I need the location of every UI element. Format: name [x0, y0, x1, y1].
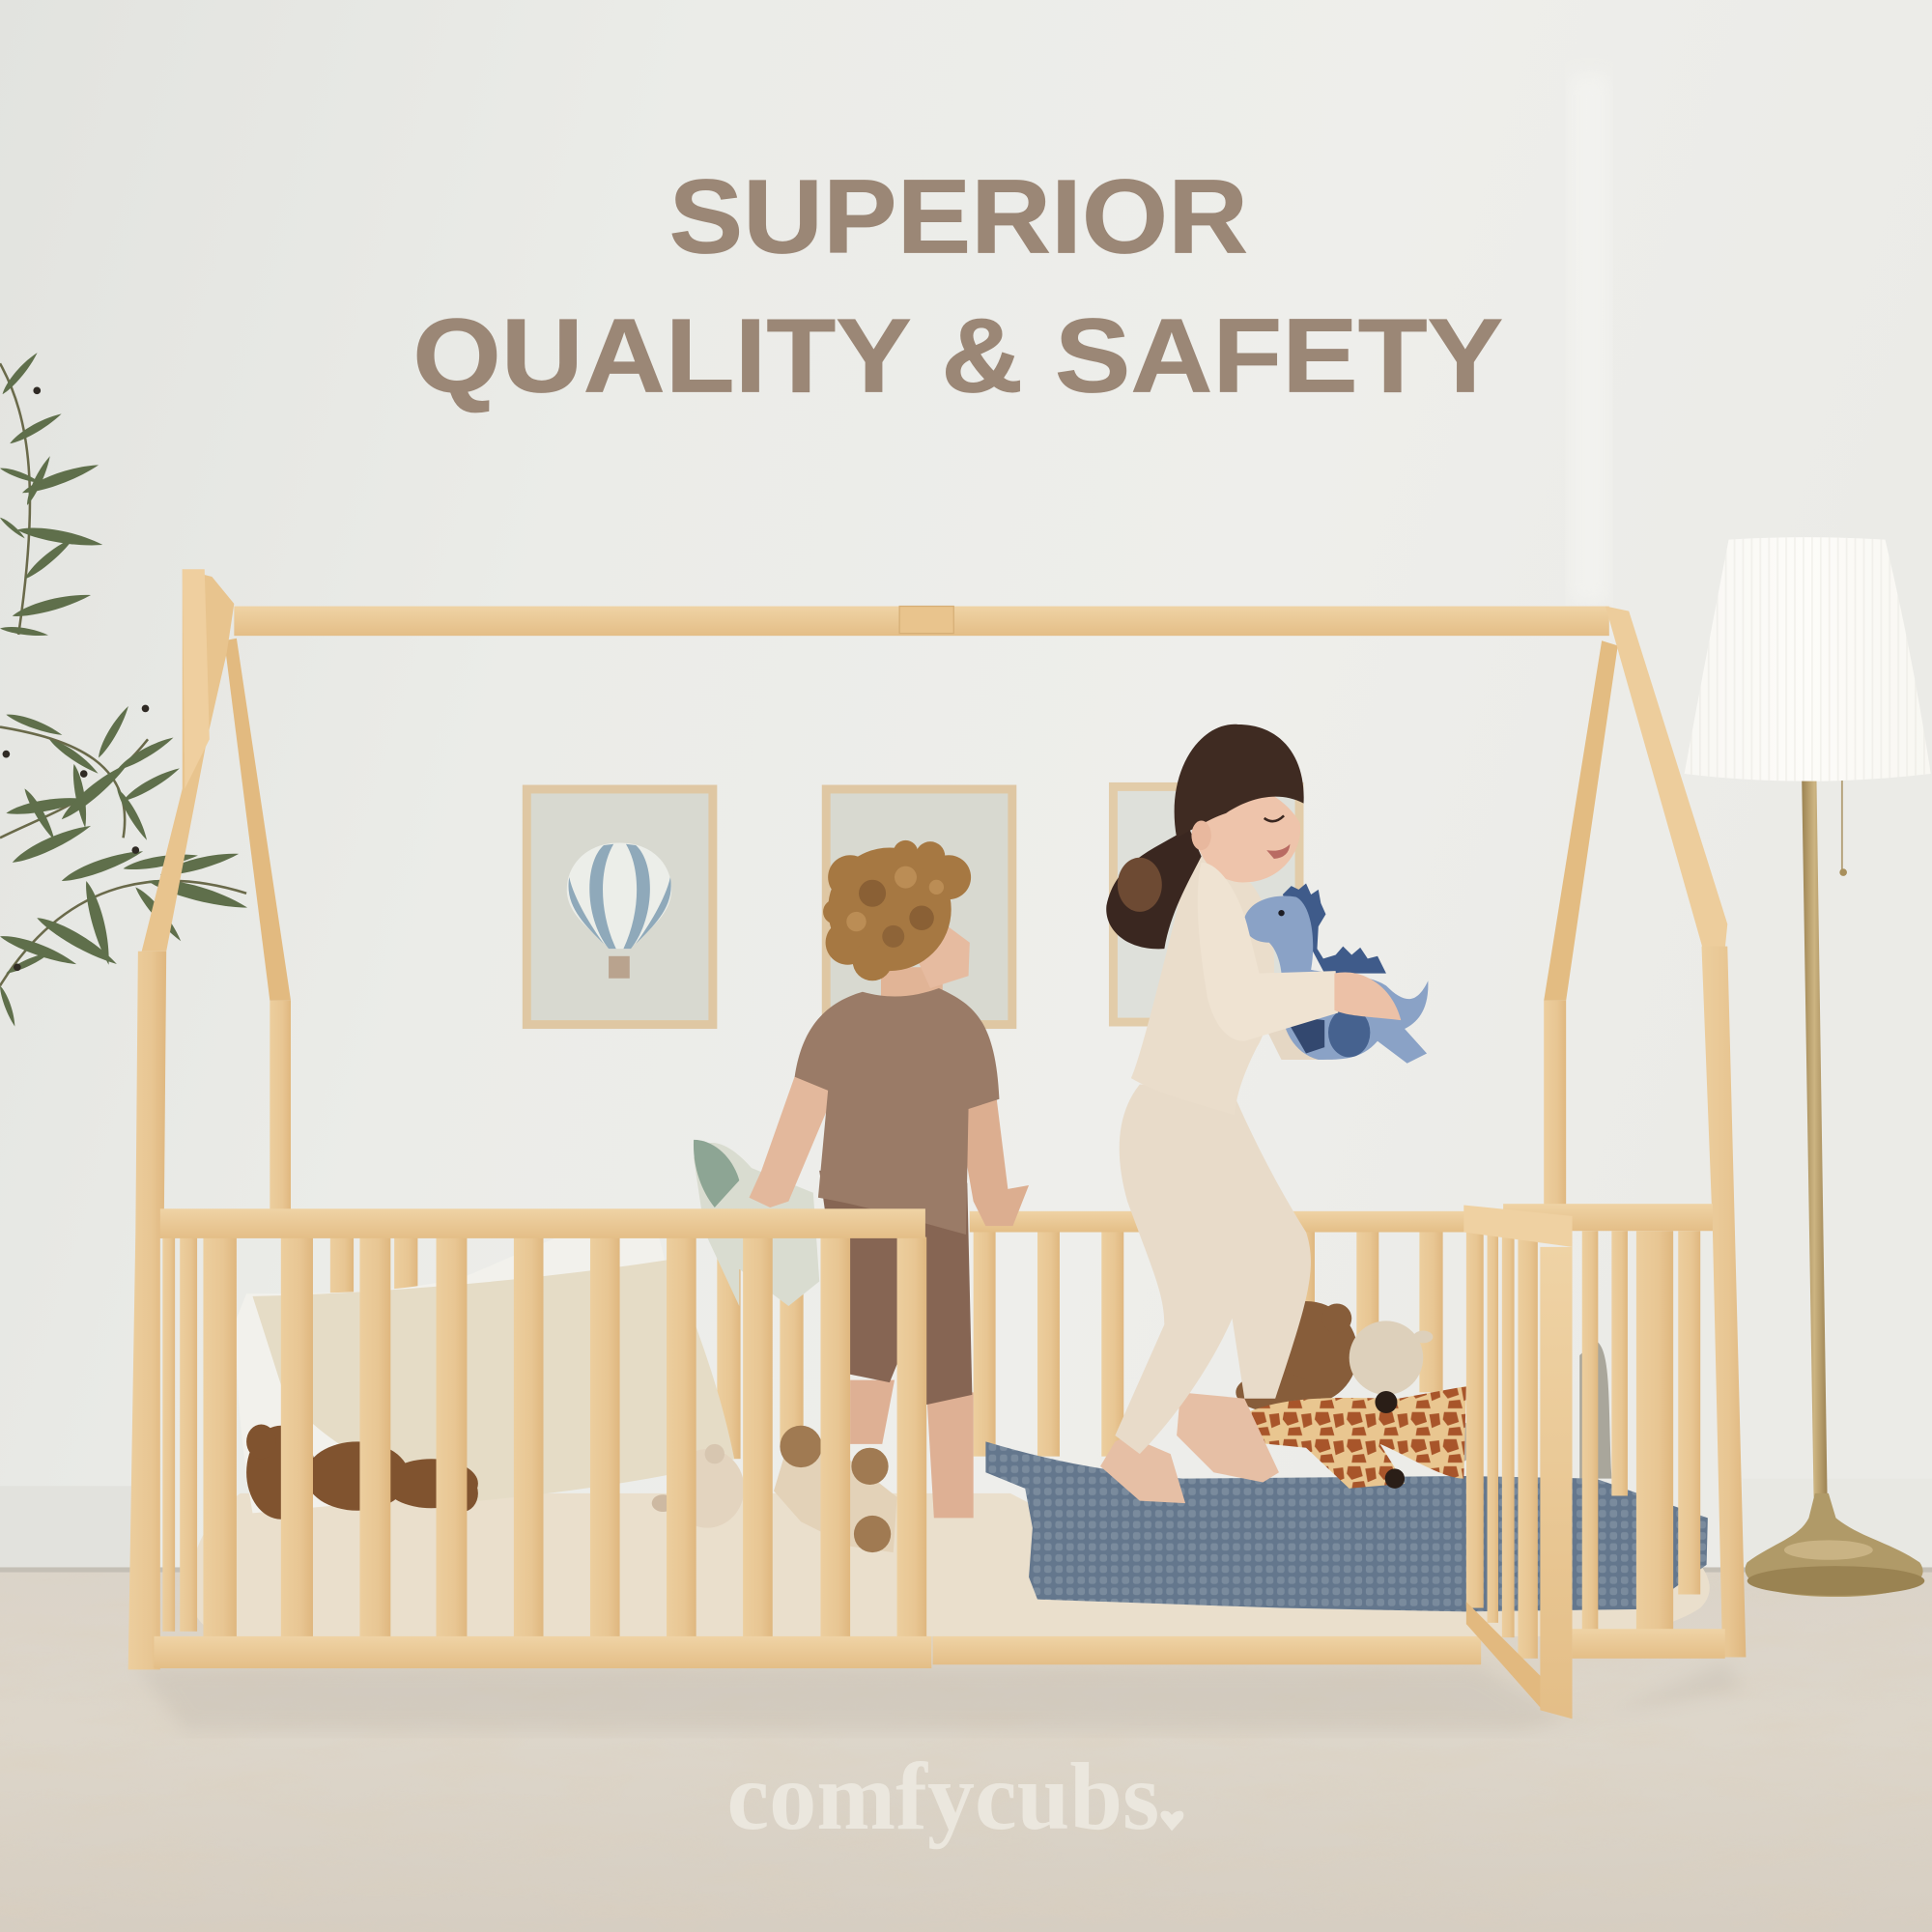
rear slats [330, 1233, 1443, 1459]
right post [1701, 947, 1746, 1658]
title line 1: SUPERIOR [669, 157, 1248, 274]
gate end post [1540, 1247, 1573, 1719]
rear frame of house bed [224, 639, 1618, 1459]
front slats [162, 1237, 926, 1638]
boy cheek [918, 918, 970, 988]
cream pillow [252, 1260, 734, 1501]
open gate [1463, 1205, 1573, 1719]
rear left post [270, 1001, 291, 1210]
girl rear arm [1263, 1023, 1333, 1060]
blue waffle blanket [985, 1441, 1708, 1611]
gate slats [1466, 1233, 1538, 1659]
girl eye [1264, 815, 1284, 821]
ridge beam [234, 607, 1609, 636]
girl feet [1100, 1392, 1279, 1503]
toy: grey plush at right [1579, 1341, 1611, 1479]
lamp base [1746, 1493, 1924, 1597]
toy: brown bear on pillow [246, 1424, 478, 1520]
ponytail highlight [1118, 858, 1162, 912]
right bottom rail [1573, 1629, 1725, 1659]
front left rail section [154, 1208, 931, 1668]
dino belly [1284, 1015, 1324, 1054]
middle bottom rail [933, 1636, 1481, 1664]
right slats [1582, 1231, 1700, 1632]
dino eye [1278, 910, 1285, 916]
framed prints [523, 782, 1303, 1029]
baseboard left [0, 1486, 133, 1570]
gable highlight [183, 569, 210, 788]
lamp pole [1802, 756, 1828, 1497]
toy: sheep right [1350, 1321, 1476, 1463]
lamp shade [1685, 537, 1931, 781]
toy: big brown bear [1236, 1301, 1358, 1412]
title [412, 157, 1503, 414]
girl [1100, 724, 1333, 1503]
rear right post [1544, 1001, 1566, 1205]
boy curly hair [823, 840, 971, 980]
girl hand on dino [1334, 972, 1401, 1020]
boy neck [881, 967, 943, 1005]
boy left arm [750, 1065, 838, 1208]
rear left rafter [224, 639, 291, 1001]
rear right rafter [1544, 640, 1618, 1001]
mattress [190, 1493, 1710, 1636]
olive plant [0, 350, 249, 1028]
toy: small sheep [652, 1444, 744, 1528]
girl torso [1131, 856, 1274, 1115]
gate top rail [1463, 1205, 1573, 1247]
right section of rail [1503, 1204, 1725, 1659]
toy: green plush accent [694, 1140, 739, 1208]
toy: blue dinosaur [1244, 884, 1428, 1064]
right top rail [1503, 1204, 1713, 1231]
toy: big giraffe [1238, 1386, 1466, 1489]
dino foot [1328, 1008, 1370, 1057]
right rafter [1605, 607, 1727, 949]
floor lamp [1685, 537, 1931, 1597]
toy: small giraffe [774, 1426, 897, 1552]
carpet floor [0, 1567, 1932, 1932]
front right roof post and gable [1605, 607, 1746, 1658]
rear top rail [970, 1211, 1466, 1233]
title line 2: QUALITY & SAFETY [412, 298, 1503, 414]
print: right [1109, 782, 1303, 1026]
balloon [567, 842, 671, 979]
girl face [1193, 781, 1300, 882]
front left roof post and gable [128, 569, 234, 1669]
girl ponytail [1106, 828, 1202, 949]
bed shadow on floor [135, 1663, 1744, 1731]
boy shirt [795, 988, 999, 1235]
gable upright [142, 569, 234, 952]
girl ear [1191, 820, 1211, 850]
white pillow [237, 1238, 690, 1513]
gate bottom rail [1466, 1602, 1543, 1710]
boy right arm [955, 1091, 1029, 1226]
girl leggings [1115, 1084, 1311, 1454]
boy shorts [819, 1171, 972, 1405]
girl front arm [1198, 863, 1401, 1041]
print: hot air balloon [523, 784, 717, 1029]
print: middle [822, 784, 1016, 1029]
dino body [1244, 896, 1428, 1064]
girl sleeve [1198, 863, 1338, 1041]
comfycubs logo: comfycubs [727, 1743, 1159, 1850]
dino spikes [1283, 884, 1386, 974]
girl mouth [1266, 844, 1290, 859]
wall light band [1570, 74, 1609, 604]
logo heart [1160, 1811, 1183, 1831]
front left post [128, 952, 166, 1669]
lamp pull chain [1839, 756, 1847, 876]
front top rail [160, 1208, 925, 1238]
toy: green plush behind [694, 1143, 819, 1306]
boy [750, 840, 1029, 1518]
toys behind blanket [1236, 1301, 1611, 1479]
girl hair [1175, 724, 1304, 838]
front bottom rail [154, 1636, 931, 1668]
baseboard right [1743, 1479, 1932, 1570]
boy legs [850, 1380, 974, 1518]
